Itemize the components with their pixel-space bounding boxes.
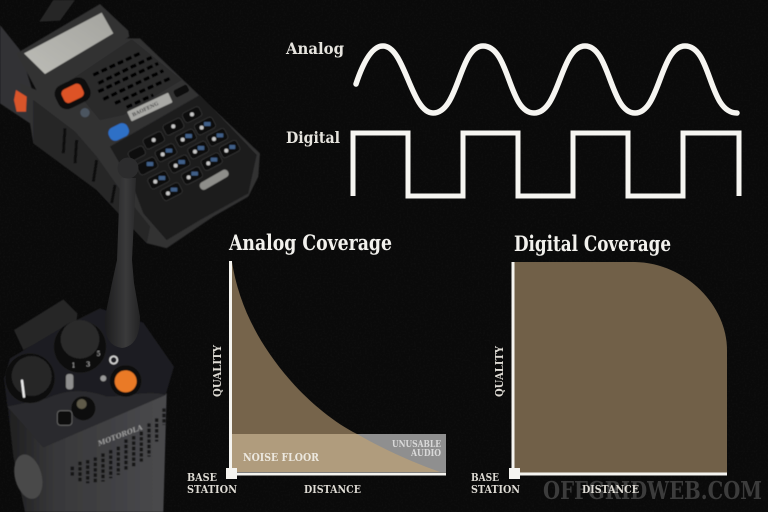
chart: digital coverage [471,231,727,496]
unusable audio zone [232,434,446,472]
channel knob: 3 [86,361,90,369]
channel knob: 5 [97,351,101,358]
photo: Motorola radio, lower left [4,299,174,512]
base station marker [226,468,237,479]
quality curve fill [514,262,727,473]
axes [230,261,446,474]
photo: handheld radio, upper left [0,0,260,248]
speaker grill [93,53,170,107]
brand plate [127,93,173,121]
side button [10,451,47,502]
top highlight [7,391,166,447]
distance axis label: DISTANCE [582,483,639,496]
lower brand plate [198,168,230,191]
digital title: Digital Coverage [514,231,671,256]
lower body [7,393,167,512]
base station marker [509,468,520,479]
analog title: Analog Coverage [228,230,392,255]
radio body [20,38,260,248]
unusable audio label: UNUSABLE [392,440,441,450]
top surface [4,308,174,447]
base station label: BASE [471,471,499,484]
top knob [39,0,75,22]
orange button [110,365,141,397]
distance axis label: DISTANCE [304,483,361,496]
keypad [127,83,241,202]
brand label: MOTOROLA [96,422,144,448]
speaker grill [72,408,164,483]
display screen [24,13,113,74]
unusable audio label: AUDIO [410,449,441,459]
analog label: Analog [285,39,344,58]
blue button [106,121,131,143]
red button [52,74,94,112]
base station label: BASE [187,471,217,484]
keypad face [110,95,257,240]
clip [14,299,77,350]
small indicator [80,108,90,117]
quality curve fill [232,262,357,434]
unusable audio label [392,440,441,459]
channel knob [54,320,106,373]
grip notches [63,128,115,203]
display housing [17,4,129,91]
side grip [33,100,150,243]
brand plate: BAOFENG [131,101,160,119]
quality axis label: QUALITY [211,345,224,397]
noise floor zone [232,434,440,472]
noise floor label: NOISE FLOOR [243,451,320,464]
channel knob: 1 [72,362,75,369]
base station label [187,471,237,496]
small controls [66,356,117,389]
digital wave [353,133,739,196]
mode button [57,411,72,425]
quality axis label: QUALITY [493,346,506,397]
digital label: Digital [286,128,340,147]
side red button [14,90,27,112]
base station label [471,471,520,496]
toggle switch [71,396,95,420]
analog wave [356,46,737,113]
volume knob [5,354,55,403]
base station label: STATION [187,483,237,496]
antenna [105,158,140,348]
base station label: STATION [471,483,520,496]
side antenna [0,25,33,123]
axes [513,262,727,474]
chart: analog coverage [187,230,446,496]
speaker panel [68,39,182,120]
